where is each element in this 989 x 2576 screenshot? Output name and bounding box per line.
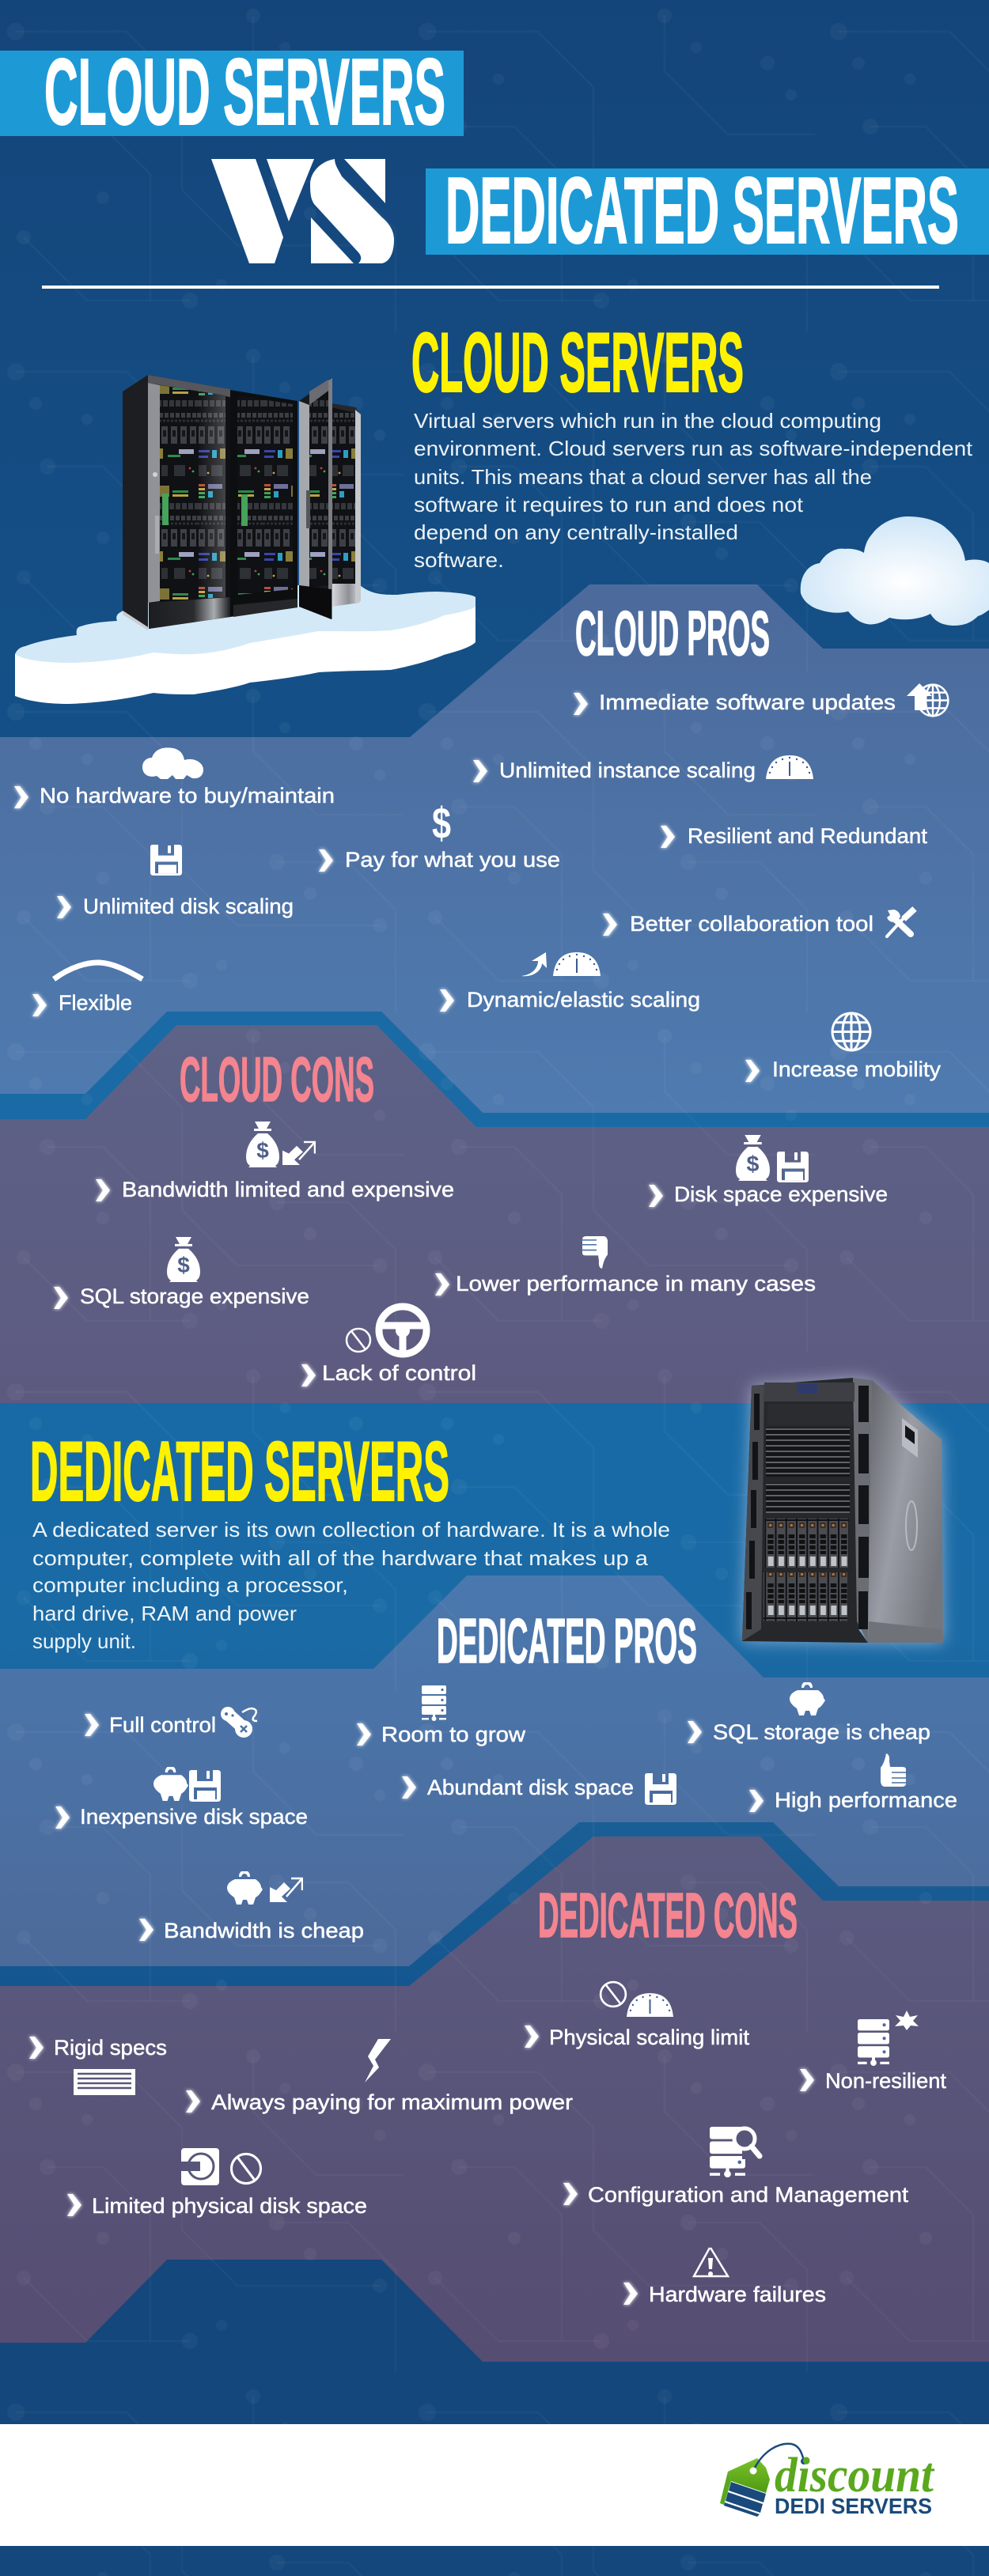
paragraph: dedicated servers definition: computer including a processor, (32, 1573, 348, 1597)
item: hardware failures: Hardware failures (649, 2283, 826, 2306)
item: room to grow (357, 1685, 526, 1746)
item: lower performance: Lower performance in many cases (456, 1272, 816, 1296)
list: dedicated cons items (29, 1982, 946, 2306)
item: flexible: Flexible (59, 991, 132, 1015)
paragraph: cloud servers definition: software. (414, 548, 504, 572)
item: high performance (749, 1753, 957, 1812)
illustration: cloud platform (15, 585, 476, 704)
item: abundant disk space: Abundant disk space (427, 1776, 634, 1799)
item: bandwidth is cheap (139, 1871, 364, 1942)
item: disk space expensive: Disk space expensive (674, 1182, 888, 1206)
illustration: server rack (123, 375, 361, 630)
item: flexible (32, 963, 142, 1016)
list: cloud cons items (54, 1122, 888, 1386)
item: increase mobility (745, 1013, 942, 1082)
item: abundant disk space (402, 1773, 676, 1805)
item: resilient and redundant: Resilient and Redundant (688, 824, 927, 848)
item: non-resilient: Non-resilient (825, 2069, 946, 2093)
item: configuration and management: Configuration and Management (588, 2183, 909, 2207)
item: immediate software updates (574, 683, 948, 716)
text: CLOUD PROS (575, 598, 770, 668)
title bar: cloud servers: CLOUD SERVERS (44, 40, 445, 145)
item: always paying for maximum power: Always paying for maximum power (211, 2090, 573, 2114)
item: rigid specs (29, 2036, 167, 2095)
panel: dedicated cons background (0, 1836, 989, 2362)
footer panel (0, 2424, 989, 2546)
item: lack of control: Lack of control (322, 1361, 476, 1385)
paragraph: dedicated servers definition (32, 1518, 670, 1653)
section background: cloud servers (0, 0, 989, 870)
text: DEDICATED SERVERS (30, 1424, 449, 1519)
item: high performance: High performance (775, 1788, 957, 1812)
item: inexpensive disk space (55, 1767, 308, 1829)
item: unlimited instance scaling: Unlimited instance scaling (499, 758, 756, 782)
item: immediate software updates: Immediate software updates (599, 690, 896, 714)
item: disk space expensive (649, 1135, 888, 1207)
icon: white cloud (801, 516, 989, 626)
item: always paying for maximum power (186, 2039, 573, 2114)
item: better collaboration tool (603, 909, 915, 936)
item: sql storage is cheap (688, 1682, 930, 1744)
item: room to grow: Room to grow (381, 1723, 526, 1746)
panel: cloud cons background (0, 1025, 989, 1403)
item: full control (85, 1707, 257, 1738)
logo: discount dedi servers: discount (775, 2449, 935, 2502)
item: better collaboration tool: Better collaboration tool (630, 912, 873, 936)
paragraph: dedicated servers definition: hard drive, RAM and power (32, 1602, 297, 1625)
item: inexpensive disk space: Inexpensive disk space (80, 1805, 308, 1829)
item: unlimited disk scaling (57, 845, 294, 918)
paragraph: dedicated servers definition: supply unit. (32, 1629, 136, 1653)
paragraph: cloud servers definition: units. This means that a cloud server has all the (414, 465, 872, 489)
item: non-resilient (800, 2010, 946, 2093)
item: pay for what you use: Pay for what you use (345, 848, 560, 872)
list: dedicated pros items (55, 1682, 957, 1942)
item: pay for what you use (319, 798, 560, 872)
paragraph: cloud servers definition: depend on any centrally-installed (414, 520, 738, 544)
panel: cloud pros background (0, 584, 989, 1113)
logo: discount dedi servers (720, 2444, 935, 2518)
item: physical scaling limit (525, 1982, 750, 2049)
item: no hardware: No hardware to buy/maintain (40, 784, 335, 808)
text: DEDICATED PROS (437, 1606, 697, 1676)
item: lower performance (435, 1236, 816, 1296)
VS emblem (211, 159, 394, 263)
item: no hardware (14, 747, 335, 808)
title bar: cloud servers (0, 40, 464, 145)
item: bandwidth is cheap: Bandwidth is cheap (164, 1919, 364, 1942)
item: rigid specs: Rigid specs (54, 2036, 167, 2060)
item: sql storage expensive (54, 1237, 309, 1309)
item: bandwidth limited and expensive: Bandwidth limited and expensive (122, 1178, 454, 1201)
item: full control: Full control (109, 1713, 216, 1737)
text: CLOUD CONS (180, 1044, 374, 1114)
panel: dedicated pros background (0, 1575, 989, 1966)
item: configuration and management (563, 2126, 909, 2207)
paragraph: cloud servers definition: Virtual servers which run in the cloud computing (414, 409, 881, 433)
item: unlimited instance scaling (473, 755, 813, 782)
list: cloud pros items (14, 683, 948, 1082)
item: dynamic/elastic scaling: Dynamic/elastic scaling (467, 988, 700, 1012)
item: lack of control (301, 1307, 476, 1386)
item: physical scaling limit: Physical scaling limit (549, 2026, 750, 2049)
item: increase mobility: Increase mobility (772, 1057, 942, 1081)
item: dynamic/elastic scaling (440, 952, 700, 1012)
divider line (42, 286, 939, 289)
item: sql storage is cheap: SQL storage is cheap (713, 1720, 930, 1744)
paragraph: cloud servers definition (414, 409, 973, 572)
panel: dedicated servers background (0, 1403, 989, 1996)
item: pay for what you use: $ (432, 798, 451, 848)
illustration: dedicated tower server (742, 1378, 943, 1643)
band: cloud cons divider (0, 1012, 989, 1186)
paragraph: dedicated servers definition: A dedicated server is its own collection of hardware. It is a whole (32, 1518, 670, 1541)
paragraph: cloud servers definition: environment. Cloud servers run as software-independent (414, 437, 973, 460)
item: unlimited disk scaling: Unlimited disk scaling (83, 895, 294, 918)
item: hardware failures (623, 2248, 826, 2306)
item: sql storage expensive: SQL storage expensive (80, 1284, 309, 1308)
item: limited physical disk space (67, 2148, 367, 2218)
logo: discount dedi servers: DEDI SERVERS (775, 2494, 932, 2518)
paragraph: cloud servers definition: software it requires to run and does not (414, 493, 804, 516)
item: limited physical disk space: Limited physical disk space (92, 2194, 367, 2218)
paragraph: dedicated servers definition: computer, complete with all of the hardware that makes up a (32, 1546, 649, 1570)
item: bandwidth limited and expensive (96, 1122, 454, 1201)
